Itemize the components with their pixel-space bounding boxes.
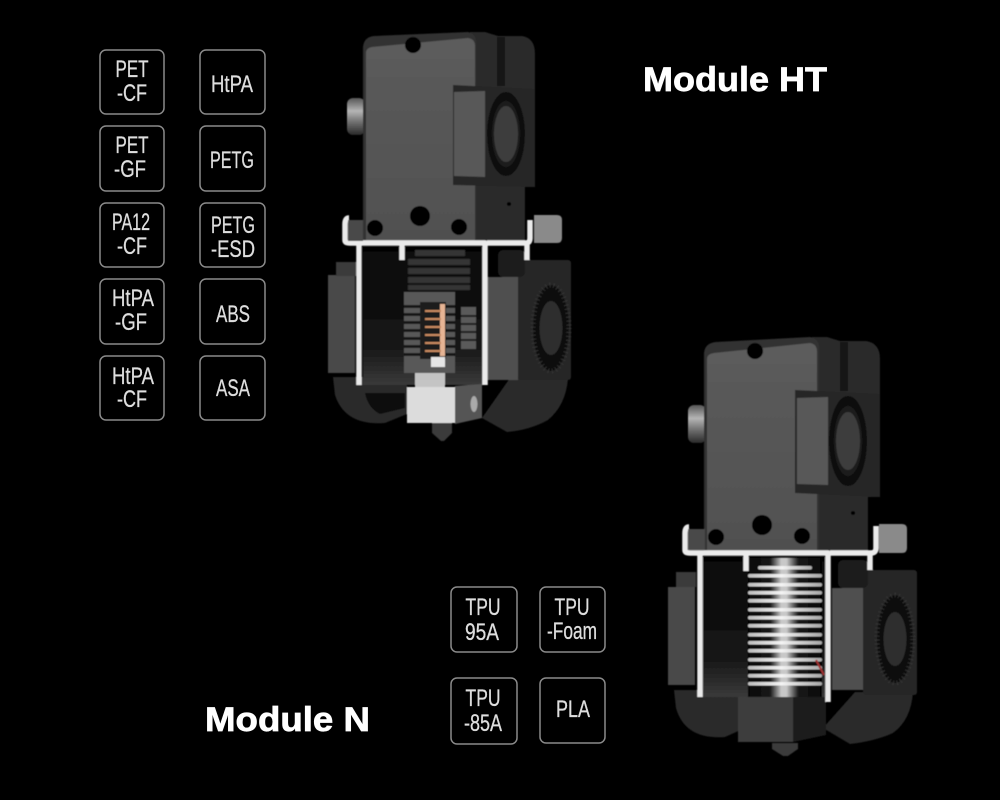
side pads and pivots bbox=[668, 560, 868, 690]
title: Module HT: Module HT bbox=[643, 61, 827, 99]
chip: HtPA-GF: HtPA bbox=[112, 285, 154, 312]
nozzle bbox=[432, 423, 452, 441]
chip: HtPA-CF: -CF bbox=[117, 386, 147, 413]
heatsink ribs bbox=[748, 566, 822, 686]
bracket tabs bbox=[534, 215, 562, 243]
nozzle bbox=[772, 743, 798, 756]
upper body front plate bbox=[704, 337, 819, 553]
cavity bbox=[363, 247, 483, 385]
material chips: Module HT bbox=[100, 50, 265, 420]
top fan bbox=[453, 85, 535, 187]
chip: PET-CF: -CF bbox=[117, 80, 147, 107]
chip: HtPA: HtPA bbox=[211, 71, 253, 98]
heater block bbox=[738, 697, 826, 742]
chip: TPU-85A: TPU bbox=[466, 685, 500, 712]
chip: TPU 95A: TPU bbox=[466, 594, 500, 621]
side pads and pivots bbox=[328, 250, 525, 380]
chip: ASA: ASA bbox=[216, 375, 250, 402]
chip: TPU 95A: 95A bbox=[465, 619, 499, 646]
chip: PETG-ESD bbox=[200, 203, 265, 267]
knob bbox=[347, 98, 365, 135]
knob bbox=[688, 405, 706, 443]
chip: PET-GF: -GF bbox=[114, 156, 146, 183]
printhead illustration: Module HT bbox=[328, 32, 571, 441]
upper body side bbox=[470, 32, 535, 243]
chip: ABS bbox=[200, 279, 265, 344]
chip: PLA: PLA bbox=[556, 696, 590, 723]
chip: PET-GF bbox=[100, 126, 164, 191]
mounting holes bbox=[367, 37, 511, 236]
chip: PA12-CF: -CF bbox=[117, 233, 147, 260]
chip: PETG-ESD: -ESD bbox=[211, 236, 255, 263]
chip: PET-CF: PET bbox=[116, 56, 149, 83]
red wire bbox=[816, 660, 824, 675]
bracket tabs bbox=[879, 524, 907, 553]
chip: ABS: ABS bbox=[216, 301, 250, 328]
top fan bbox=[795, 390, 880, 497]
chip: TPU-85A: -85A bbox=[464, 710, 502, 737]
right blower bbox=[482, 260, 571, 432]
chip: PLA bbox=[540, 678, 605, 743]
chip: HtPA-CF: HtPA bbox=[112, 363, 154, 390]
chip: TPU-Foam bbox=[540, 587, 605, 652]
black heatsink coils bbox=[408, 250, 470, 290]
heatsink glow bbox=[748, 558, 822, 698]
heater block bbox=[407, 373, 482, 424]
chip: PETG bbox=[200, 126, 265, 191]
upper body side bbox=[812, 337, 880, 553]
left lower duct bbox=[333, 377, 407, 423]
title: Module N: Module N bbox=[205, 701, 370, 739]
upper body front plate bbox=[363, 32, 476, 243]
mounting holes bbox=[708, 343, 855, 545]
chip: PET-GF: PET bbox=[116, 132, 149, 159]
chip: TPU 95A bbox=[451, 587, 517, 652]
printhead illustration: Module N bbox=[668, 337, 917, 756]
chip: PA12-CF bbox=[100, 203, 164, 267]
chip: PA12-CF: PA12 bbox=[112, 209, 150, 236]
chip: HtPA-GF: -GF bbox=[115, 309, 147, 336]
material chips: Module N bbox=[451, 587, 605, 744]
white bracket bbox=[685, 526, 876, 702]
chip: PETG: PETG bbox=[210, 147, 254, 174]
right blower bbox=[823, 570, 917, 744]
chip: TPU-85A bbox=[451, 678, 517, 744]
chip: HtPA bbox=[200, 50, 265, 114]
cavity bbox=[703, 557, 825, 697]
chip: HtPA-CF bbox=[100, 356, 164, 420]
chip: TPU-Foam: -Foam bbox=[547, 618, 597, 645]
chip: PETG-ESD: PETG bbox=[211, 212, 255, 239]
chip: HtPA-GF bbox=[100, 279, 164, 344]
left lower duct bbox=[674, 690, 745, 737]
white bracket bbox=[345, 218, 530, 385]
chip: TPU-Foam: TPU bbox=[554, 594, 590, 621]
heat-break housing bbox=[404, 292, 476, 373]
chip: ASA bbox=[200, 356, 265, 420]
chip: PET-CF bbox=[100, 50, 164, 114]
